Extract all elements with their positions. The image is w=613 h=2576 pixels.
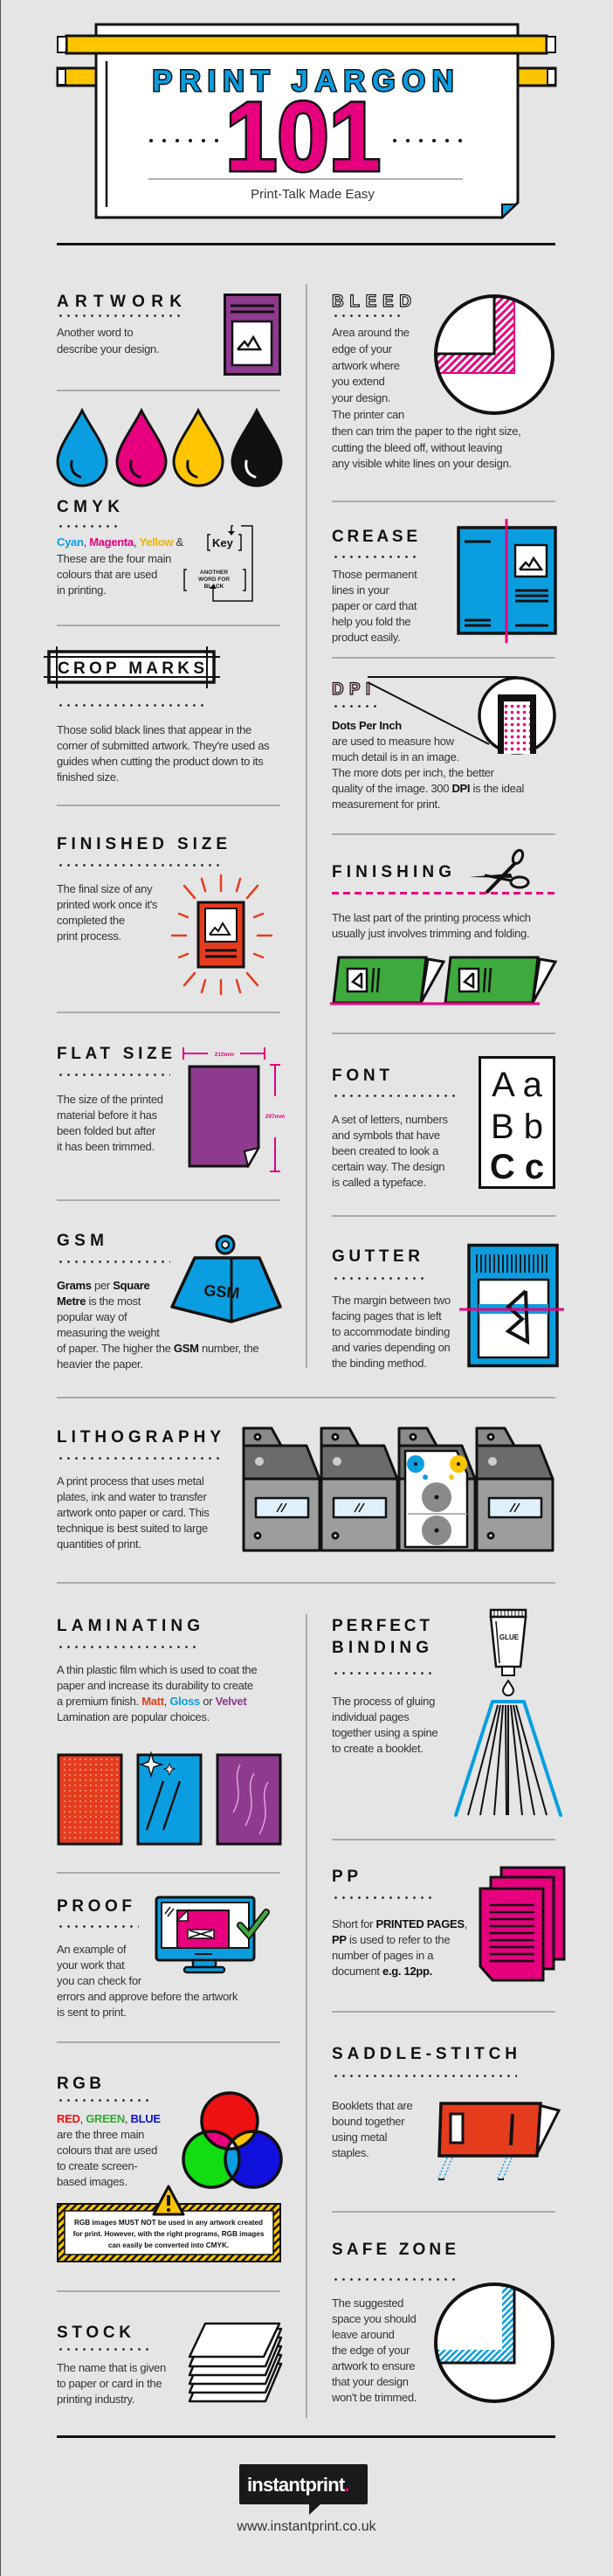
text: gutter: The margin between two [332, 1294, 451, 1307]
heading: gutter: GUTTER [332, 1247, 420, 1266]
text: lithography: quantities of print. [57, 1537, 141, 1550]
text: font: and symbols that have [332, 1129, 440, 1142]
heading: crop marks box [44, 646, 220, 688]
text: dpi: quality of the image. 300 DPI is the ideal [332, 782, 524, 795]
text: gutter: facing pages that is left [332, 1309, 441, 1323]
heading: flat size: FLAT SIZE [57, 1045, 172, 1063]
text: bleed: then can trim the paper to the right size, [332, 425, 520, 438]
text: font: A set of letters, numbers [332, 1113, 448, 1126]
text: saddle-stitch [332, 2098, 412, 2161]
text: rgb [57, 2111, 161, 2190]
text: cmyk: Cyan, Magenta, Yellow & [57, 535, 183, 549]
text: font: been created to look a [332, 1144, 438, 1157]
text: safe zone: the edge of your [332, 2344, 410, 2357]
icon: key bracket note: WORD FOR [198, 577, 230, 583]
text: proof [57, 1942, 238, 2020]
heading: perfect binding [332, 1614, 430, 1656]
text: proof: is sent to print. [57, 2006, 126, 2019]
icon: printing press [242, 1426, 557, 1553]
panel: gutter [332, 1242, 566, 1369]
text: dpi: The more dots per inch, the better [332, 766, 494, 779]
callout: rgb warning: RGB images MUST NOT be used in any artwork created [74, 2219, 263, 2227]
icon: gsm weight [170, 1232, 282, 1328]
text: crop marks: corner of submitted artwork. They're used as [57, 739, 269, 752]
text: pp [332, 1916, 467, 1979]
text: bleed: Area around the [332, 326, 410, 339]
logo: instantprint: instantprint. [247, 2474, 349, 2496]
text: saddle-stitch: using metal [332, 2131, 387, 2144]
panel: flat size [57, 1045, 285, 1172]
text: rgb: RED, GREEN, BLUE [57, 2112, 161, 2125]
icon: stapled booklet [438, 2102, 561, 2182]
icon: scissors [470, 849, 529, 894]
text: finishing [332, 911, 531, 940]
text: finished size: The final size of any [57, 882, 152, 895]
header banner: 101 [225, 82, 381, 191]
text: lithography: technique is best suited to large [57, 1522, 208, 1535]
text: safe zone: that your design [332, 2375, 409, 2388]
icon: gutter [459, 1244, 566, 1368]
panel: saddle-stitch [332, 2041, 561, 2184]
icon: lamination samples [57, 1751, 282, 1847]
text: safe zone: space you should [332, 2312, 416, 2325]
text: bleed [332, 326, 520, 470]
panel: laminating [57, 1612, 282, 1847]
icon: paper stack [188, 2322, 284, 2405]
panel: stock [57, 2319, 284, 2407]
text: stock: The name that is given [57, 2361, 166, 2374]
text: font [332, 1113, 448, 1189]
text: font: certain way. The design [332, 1160, 444, 1173]
text: crease: product easily. [332, 631, 400, 644]
text: perfect binding: The process of gluing [332, 1695, 435, 1708]
text: perfect binding: to create a booklet. [332, 1742, 424, 1755]
text: safe zone: artwork to ensure [332, 2359, 415, 2372]
icon: artwork [224, 294, 281, 376]
panel: pp [332, 1864, 568, 1983]
text: bleed: The printer can [332, 408, 404, 421]
text: stock [57, 2360, 166, 2407]
header banner [56, 23, 557, 220]
text: saddle-stitch: bound together [332, 2115, 404, 2128]
icon: font specimen: B b [491, 1108, 543, 1146]
text: laminating [57, 1662, 257, 1725]
text: saddle-stitch: staples. [332, 2146, 368, 2159]
text: crop marks: finished size. [57, 770, 119, 784]
icon: folders [330, 956, 557, 1005]
panel: bleed [332, 293, 554, 470]
heading: lithography: LITHOGRAPHY [57, 1428, 221, 1447]
text: artwork: describe your design. [57, 342, 159, 355]
text: crease [332, 568, 417, 644]
heading: crease: CREASE [332, 528, 417, 546]
heading: proof: PROOF [57, 1897, 132, 1916]
text: rgb: colours that are used [57, 2144, 157, 2157]
header banner: Print-Talk Made Easy [251, 187, 375, 202]
text: bleed: artwork where [332, 359, 400, 372]
text: gutter [332, 1293, 451, 1371]
panel: perfect binding [332, 1607, 566, 1819]
panel: safe zone [332, 2241, 554, 2404]
heading: artwork: ARTWORK [57, 293, 182, 311]
heading: finished size: FINISHED SIZE [57, 835, 227, 853]
text: dpi: are used to measure how [332, 735, 454, 748]
heading: rgb: RGB [57, 2075, 101, 2093]
heading: perfect binding: BINDING [332, 1639, 429, 1657]
text: stock: printing industry. [57, 2393, 134, 2406]
text: pp: number of pages in a [332, 1949, 433, 1962]
icon: crease [457, 519, 557, 643]
logo: instantprint [239, 2464, 368, 2515]
text: finished size: completed the [57, 914, 125, 927]
heading: laminating: LAMINATING [57, 1617, 200, 1635]
text: crop marks: Those solid black lines that appear in the [57, 723, 251, 736]
text: flat size [57, 1093, 163, 1153]
text: rgb: based images. [57, 2175, 127, 2188]
text: dpi: Dots Per Inch [332, 719, 402, 732]
text: dpi: measurement for print. [332, 798, 440, 811]
heading: safe zone: SAFE ZONE [332, 2241, 456, 2259]
text: finished size [57, 882, 157, 943]
panel: artwork [57, 293, 281, 376]
text: flat size: material before it has [57, 1108, 157, 1122]
icon: printed pages [479, 1866, 568, 1983]
icon: flat size sheet: 210mm [215, 1052, 234, 1058]
text: flat size: been folded but after [57, 1124, 155, 1137]
icon: font specimen: A a [492, 1066, 543, 1104]
icon: rgb venn [182, 2091, 283, 2189]
text: font: is called a typeface. [332, 1176, 426, 1189]
heading: font: FONT [332, 1067, 389, 1085]
text: saddle-stitch: Booklets that are [332, 2099, 412, 2112]
icon: monitor proof [155, 1895, 272, 1975]
panel: lithography [57, 1424, 557, 1553]
text: artwork: Another word to [57, 326, 133, 339]
icon: ink drops [56, 407, 283, 487]
text: safe zone [332, 2296, 417, 2406]
text: pp: document e.g. 12pp. [332, 1965, 432, 1978]
text: gsm: of paper. The higher the GSM number, the [57, 1342, 258, 1355]
icon: flat size sheet: 297mm [265, 1114, 285, 1120]
text: dpi: much detail is in an image. [332, 750, 459, 763]
panel: proof [57, 1891, 272, 2020]
text: gsm [57, 1278, 258, 1372]
callout: rgb warning [57, 2186, 282, 2264]
text: laminating: Lamination are popular choices. [57, 1710, 210, 1723]
text: crease: help you fold the [332, 615, 410, 628]
text: perfect binding: together using a spine [332, 1726, 437, 1739]
icon: key bracket note: Key [212, 536, 234, 549]
heading: bleed: BLEED [332, 293, 411, 311]
panel: gsm [57, 1227, 282, 1371]
text: gsm: Metre is the most [57, 1295, 141, 1308]
text: crease: lines in your [332, 584, 389, 597]
text: safe zone: The suggested [332, 2296, 403, 2310]
text: gutter: and varies depending on [332, 1341, 451, 1354]
panel: rgb [57, 2075, 283, 2262]
icon: finished size card [171, 874, 272, 996]
header banner: PRINT JARGON [153, 65, 460, 98]
text: perfect binding: individual pages [332, 1710, 409, 1723]
text: safe zone: won't be trimmed. [332, 2391, 417, 2404]
text: gutter: the binding method. [332, 1357, 426, 1370]
callout: rgb warning: can easily be converted into CMYK. [108, 2241, 229, 2249]
panel: cmyk [57, 498, 253, 602]
panel: cmyk: colours that are used [57, 568, 157, 581]
panel: crease [332, 519, 557, 644]
panel: cmyk: in printing. [57, 584, 106, 597]
text: rgb: are the three main [57, 2128, 144, 2141]
heading: stock: STOCK [57, 2324, 131, 2342]
text: dpi [332, 719, 524, 811]
text: bleed: any visible white lines on your design. [332, 457, 512, 470]
text: flat size: The size of the printed [57, 1093, 163, 1106]
text: gsm: measuring the weight [57, 1326, 160, 1339]
icon: glue and book spread: GLUE [499, 1633, 520, 1641]
icon: key bracket note [183, 525, 253, 602]
icon: key bracket note: ANOTHER [200, 570, 228, 576]
text: finished size: printed work once it's [57, 898, 157, 911]
heading: saddle-stitch: SADDLE-STITCH [332, 2045, 517, 2063]
heading: gsm: GSM [57, 1232, 104, 1250]
text: artwork [57, 326, 159, 355]
text: pp: Short for PRINTED PAGES, [332, 1917, 467, 1930]
text: finishing: usually just involves trimming and folding. [332, 927, 529, 940]
icon: magnifier circle [368, 676, 556, 755]
icon: font specimen: C c [490, 1148, 544, 1186]
text: gsm: popular way of [57, 1310, 127, 1323]
text: laminating: paper and increase its durability to create [57, 1679, 253, 1692]
heading: dpi: DPI [332, 680, 370, 699]
text: laminating: a premium finish. Matt, Gloss or Velvet [57, 1695, 246, 1708]
text: proof: your work that [57, 1958, 124, 1972]
text: lithography: artwork onto paper or card. This [57, 1506, 209, 1519]
panel: finishing [330, 849, 557, 1005]
text: crop marks: guides when cutting the product down to its [57, 755, 263, 768]
icon: bleed circle [434, 294, 554, 415]
icon: flat size sheet [183, 1047, 285, 1172]
icon: safe zone circle [434, 2282, 554, 2403]
icon: glue and book spread [454, 1607, 566, 1819]
text: proof: you can check for [57, 1974, 141, 1987]
icon: gsm weight: GSM [203, 1281, 240, 1302]
text: crease: Those permanent [332, 568, 417, 581]
footer url: www.instantprint.co.uk [237, 2519, 376, 2534]
panel: cmyk: These are the four main [57, 552, 171, 565]
text: bleed: cutting the bleed off, without leaving [332, 441, 502, 454]
icon: key bracket note: BLACK [204, 584, 224, 590]
heading: perfect binding: PERFECT [332, 1617, 430, 1635]
panel: dpi [332, 676, 556, 811]
text: bleed: edge of your [332, 342, 392, 356]
text: gutter: to accommodate binding [332, 1325, 450, 1338]
text: laminating: A thin plastic film which is used to coat the [57, 1663, 257, 1676]
text: gsm: Grams per Square [57, 1279, 150, 1292]
text: gsm: heavier the paper. [57, 1357, 143, 1371]
text: finished size: print process. [57, 929, 121, 943]
heading: pp: PP [332, 1868, 358, 1886]
text: crease: paper or card that [332, 599, 417, 612]
text: lithography [57, 1474, 209, 1552]
text: perfect binding [332, 1694, 437, 1757]
text: bleed: you extend [332, 375, 385, 388]
text: bleed: your design. [332, 391, 390, 404]
text: flat size: it has been trimmed. [57, 1140, 155, 1153]
panel: crop marks [44, 646, 269, 784]
text: safe zone: leave around [332, 2328, 395, 2341]
text: crop marks [57, 723, 269, 784]
callout: rgb warning: for print. However, with the right programs, RGB images [73, 2230, 265, 2238]
text: lithography: plates, ink and water to transfer [57, 1490, 206, 1503]
text: pp: PP is used to refer to the [332, 1933, 450, 1946]
panel: font [332, 1056, 555, 1189]
panel: crop marks: CROP MARKS [58, 660, 204, 678]
text: stock: to paper or card in the [57, 2377, 162, 2390]
text: proof: errors and approve before the artwork [57, 1990, 238, 2003]
text: lithography: A print process that uses metal [57, 1474, 203, 1488]
heading: cmyk: CMYK [57, 498, 120, 516]
heading: finishing: FINISHING [332, 863, 451, 881]
panel: finished size [57, 835, 272, 996]
text: finishing: The last part of the printing process which [332, 911, 531, 924]
icon: font specimen [479, 1056, 555, 1189]
text: proof: An example of [57, 1943, 126, 1956]
text: rgb: to create screen- [57, 2159, 137, 2172]
